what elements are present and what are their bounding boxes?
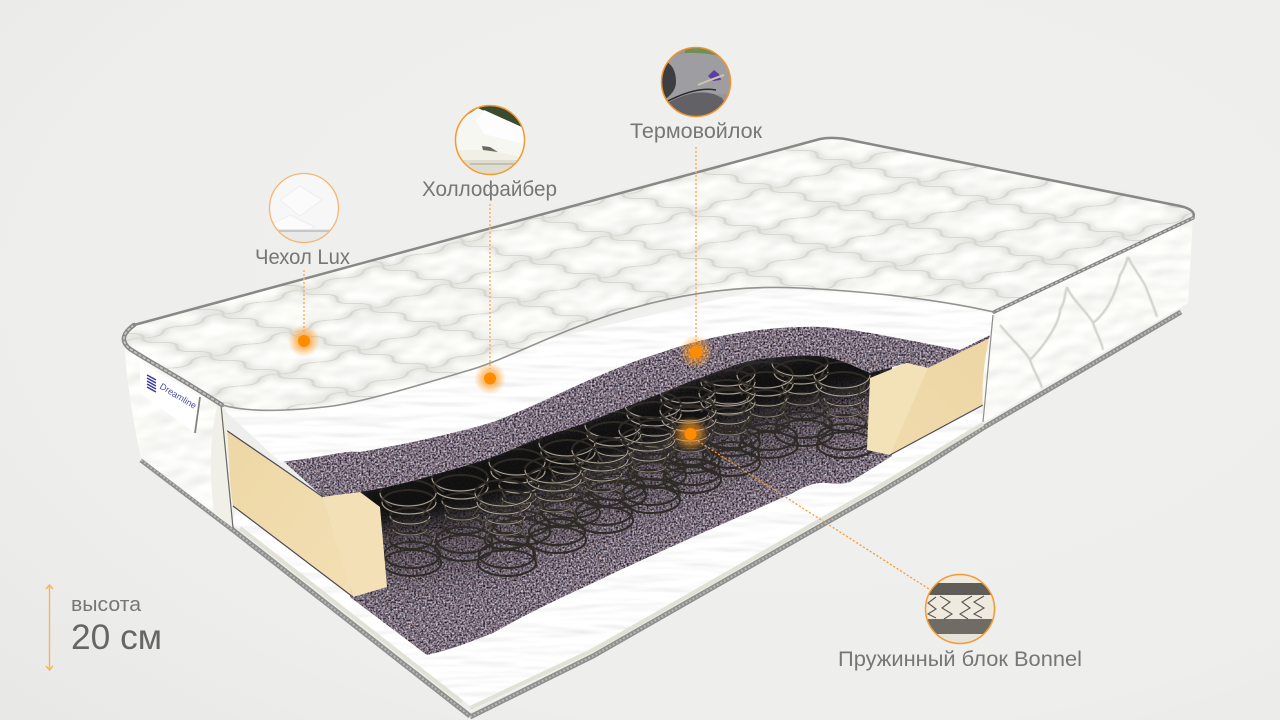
label: Пружинный блок Bonnel: [838, 648, 1082, 671]
thumbnail: cover: [270, 174, 338, 232]
label: Холлофайбер: [422, 178, 557, 201]
leader line: [698, 441, 929, 589]
callout: Чехол Lux: [255, 174, 350, 357]
marker: [679, 335, 713, 369]
callout: Холлофайбер: [422, 106, 557, 394]
thumbnail: felt: [662, 46, 730, 116]
leader line: [695, 147, 697, 343]
base piping: [141, 312, 1181, 717]
label: height caption: высота: [71, 594, 142, 616]
callout: Пружинный блок Bonnel: [672, 416, 1082, 671]
label: Термовойлок: [630, 120, 763, 143]
marker: [672, 416, 708, 452]
top felt layer: [280, 310, 990, 497]
mattress cross-section: [124, 138, 1194, 717]
marker: [288, 325, 320, 357]
right foam block: [867, 338, 990, 455]
height indicator: [46, 585, 162, 670]
callout: Термовойлок: [630, 46, 763, 369]
leader line: [303, 270, 305, 332]
cover piping: [124, 138, 1194, 410]
brand tag: [140, 362, 200, 433]
value: height: 20 см: [71, 618, 162, 657]
cavity shadow: [350, 340, 892, 583]
right side panel: [982, 217, 1193, 422]
brand logo mark: [147, 375, 156, 392]
arrow: height: [46, 585, 53, 670]
brand name: Dreamline: [158, 381, 198, 411]
bottom hollofiber layer: [233, 405, 983, 708]
left foam block: [223, 428, 387, 597]
thumbnail: spring block: [926, 575, 994, 643]
bottom felt layer: [350, 330, 892, 655]
leader line: [489, 204, 491, 369]
left side panel: [124, 342, 233, 528]
label: Чехол Lux: [255, 246, 350, 269]
thumbnail: hollofiber: [456, 106, 524, 174]
top hollofiber layer: [220, 280, 995, 462]
top quilted cover: [124, 138, 1194, 410]
bonnel springs: [380, 350, 875, 576]
marker: [474, 362, 506, 394]
